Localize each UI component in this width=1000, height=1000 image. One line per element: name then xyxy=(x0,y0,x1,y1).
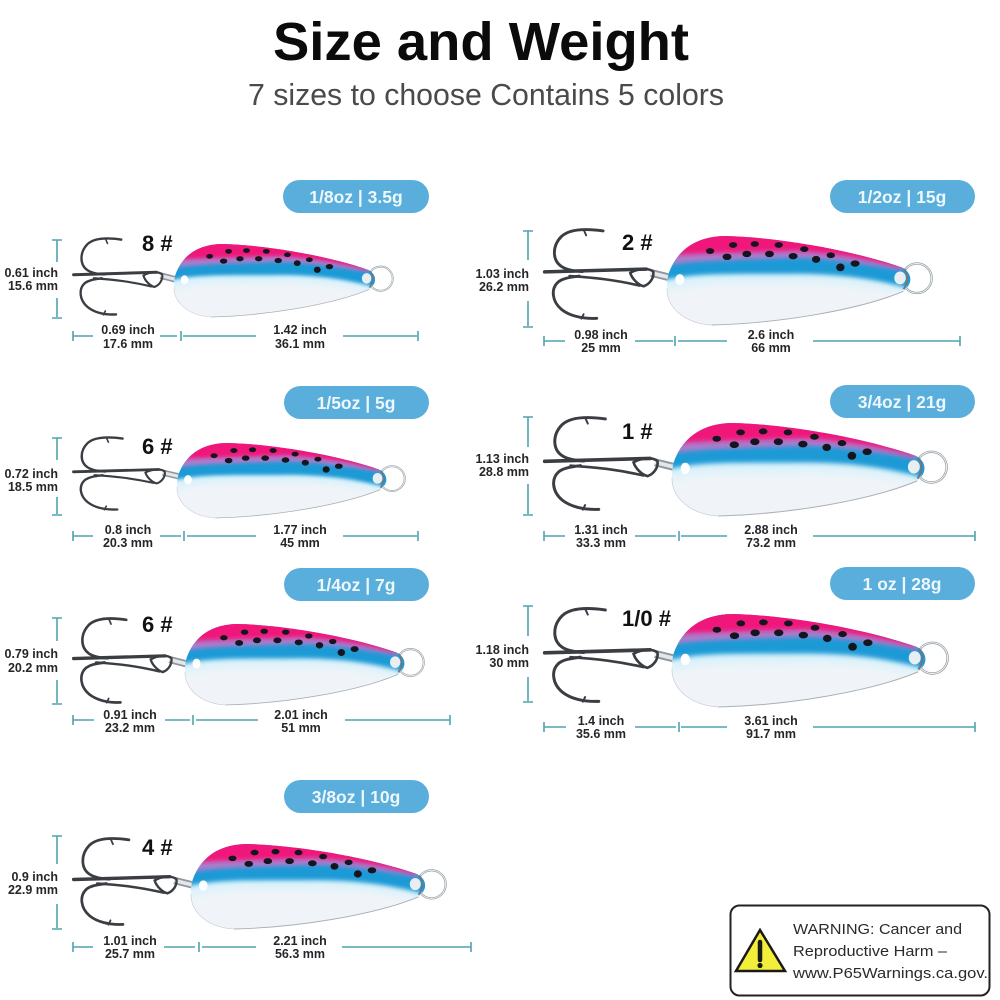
height dimension: 0.9 inch xyxy=(11,870,58,884)
body length dimension: 1.42 inch xyxy=(273,323,327,337)
height dimension: 30 mm xyxy=(489,656,529,670)
height dimension xyxy=(4,438,62,515)
lure entry: 1# 3/4oz xyxy=(476,385,975,550)
lure entry: 4# 3/8oz xyxy=(8,780,471,961)
height dimension xyxy=(476,606,533,702)
body length dimension: 36.1 mm xyxy=(275,337,325,351)
spoon body xyxy=(666,236,933,326)
hook length dimension: 35.6 mm xyxy=(576,727,626,741)
treble hook xyxy=(72,436,179,511)
body length dimension: 91.7 mm xyxy=(746,727,796,741)
hook length dimension xyxy=(73,523,184,550)
weight pill: 1 oz | 28g xyxy=(863,574,941,594)
spoon body xyxy=(176,443,406,518)
spoon body xyxy=(672,423,948,516)
hook length dimension xyxy=(73,323,181,351)
height dimension: 0.79 inch xyxy=(4,647,58,661)
size label: 6 # xyxy=(142,612,173,637)
warning text: www.P65Warnings.ca.gov. xyxy=(792,966,988,982)
warning text: WARNING: Cancer and xyxy=(793,922,962,938)
height dimension: 26.2 mm xyxy=(479,280,529,294)
hook length dimension: 25 mm xyxy=(581,341,621,355)
size label: 6 # xyxy=(142,434,173,459)
weight pill: 3/8oz | 10g xyxy=(312,787,400,807)
size label: 2 # xyxy=(622,230,653,255)
warning text: Reproductive Harm – xyxy=(793,944,948,960)
body length dimension: 45 mm xyxy=(280,536,320,550)
height dimension: 20.2 mm xyxy=(8,661,58,675)
height dimension: 0.72 inch xyxy=(4,467,58,481)
body length dimension xyxy=(183,323,418,351)
treble hook xyxy=(542,228,669,320)
body length dimension xyxy=(681,714,975,741)
hook length dimension: 1.01 inch xyxy=(103,934,157,948)
body length dimension: 51 mm xyxy=(281,721,321,735)
height dimension xyxy=(476,231,533,327)
size label: 1 # xyxy=(622,419,653,444)
body length dimension: 66 mm xyxy=(751,341,791,355)
height dimension: 15.6 mm xyxy=(8,279,58,293)
hook length dimension: 0.98 inch xyxy=(574,328,628,342)
body length dimension: 2.88 inch xyxy=(744,523,798,537)
height dimension: 1.03 inch xyxy=(476,267,529,281)
hook length dimension: 0.69 inch xyxy=(101,323,155,337)
spoon body xyxy=(190,844,447,930)
body length dimension: 3.61 inch xyxy=(744,714,798,728)
body length dimension: 2.21 inch xyxy=(273,934,327,948)
height dimension: 18.5 mm xyxy=(8,480,58,494)
weight pill xyxy=(284,568,429,601)
body length dimension: 2.6 inch xyxy=(748,328,794,342)
treble hook xyxy=(72,617,186,704)
treble hook xyxy=(542,416,674,511)
weight pill: 1/4oz | 7g xyxy=(317,575,395,595)
hook length dimension xyxy=(544,523,679,550)
body length dimension xyxy=(678,328,960,355)
hook length dimension: 17.6 mm xyxy=(103,337,153,351)
icon: warning triangle xyxy=(736,930,785,971)
treble hook xyxy=(72,237,175,316)
hook length dimension: 25.7 mm xyxy=(105,947,155,961)
spoon body xyxy=(672,614,949,708)
height dimension xyxy=(476,417,533,515)
weight pill xyxy=(284,386,429,419)
title: Size and Weight xyxy=(273,12,689,72)
size label: 4 # xyxy=(142,835,173,860)
hook length dimension xyxy=(544,328,675,355)
warning text xyxy=(792,922,988,982)
height dimension xyxy=(4,618,62,704)
hook length dimension: 23.2 mm xyxy=(105,721,155,735)
body length dimension: 2.01 inch xyxy=(274,708,328,722)
weight pill xyxy=(284,780,429,813)
height dimension: 28.8 mm xyxy=(479,465,529,479)
body length dimension: 73.2 mm xyxy=(746,536,796,550)
height dimension xyxy=(8,836,62,929)
hook length dimension xyxy=(73,934,199,961)
hook length dimension xyxy=(73,708,193,735)
height dimension: 22.9 mm xyxy=(8,883,58,897)
weight pill xyxy=(830,567,975,600)
height dimension xyxy=(4,240,62,318)
hook length dimension xyxy=(544,714,679,741)
lure entry: 8# 1/8oz xyxy=(4,180,429,351)
weight pill xyxy=(283,180,429,213)
spoon body xyxy=(174,244,394,318)
weight pill: 1/2oz | 15g xyxy=(858,187,946,207)
body length dimension: 1.77 inch xyxy=(273,523,327,537)
body length dimension: 56.3 mm xyxy=(275,947,325,961)
hook length dimension: 20.3 mm xyxy=(103,536,153,550)
warning box xyxy=(730,906,990,996)
hook length dimension: 0.8 inch xyxy=(105,523,151,537)
hook length dimension: 33.3 mm xyxy=(576,536,626,550)
lure entry: 1/0# 1oz xyxy=(476,567,975,741)
hook length dimension: 0.91 inch xyxy=(103,708,157,722)
subtitle: 7 sizes to choose Contains 5 colors xyxy=(248,77,724,112)
weight pill: 1/5oz | 5g xyxy=(317,393,395,413)
height dimension: 0.61 inch xyxy=(4,266,58,280)
lure entry: 2# 1/2oz xyxy=(476,180,975,355)
weight pill xyxy=(830,180,975,213)
weight pill xyxy=(830,385,975,418)
treble hook xyxy=(72,837,192,926)
height dimension: 1.18 inch xyxy=(476,643,529,657)
height dimension: 1.13 inch xyxy=(476,452,529,466)
lure entry: 6# 1/5oz xyxy=(4,386,429,550)
hook length dimension: 1.4 inch xyxy=(578,714,624,728)
body length dimension xyxy=(681,523,975,550)
weight pill: 1/8oz | 3.5g xyxy=(309,187,403,207)
body length dimension xyxy=(202,934,471,961)
body length dimension xyxy=(196,708,450,735)
size label: 1/0 # xyxy=(622,606,671,631)
spoon body xyxy=(184,624,425,706)
hook length dimension: 1.31 inch xyxy=(574,523,628,537)
lure entry: 6# 1/4oz xyxy=(4,568,450,735)
treble hook xyxy=(542,607,674,703)
size label: 8 # xyxy=(142,231,173,256)
weight pill: 3/4oz | 21g xyxy=(858,392,946,412)
body length dimension xyxy=(187,523,418,550)
